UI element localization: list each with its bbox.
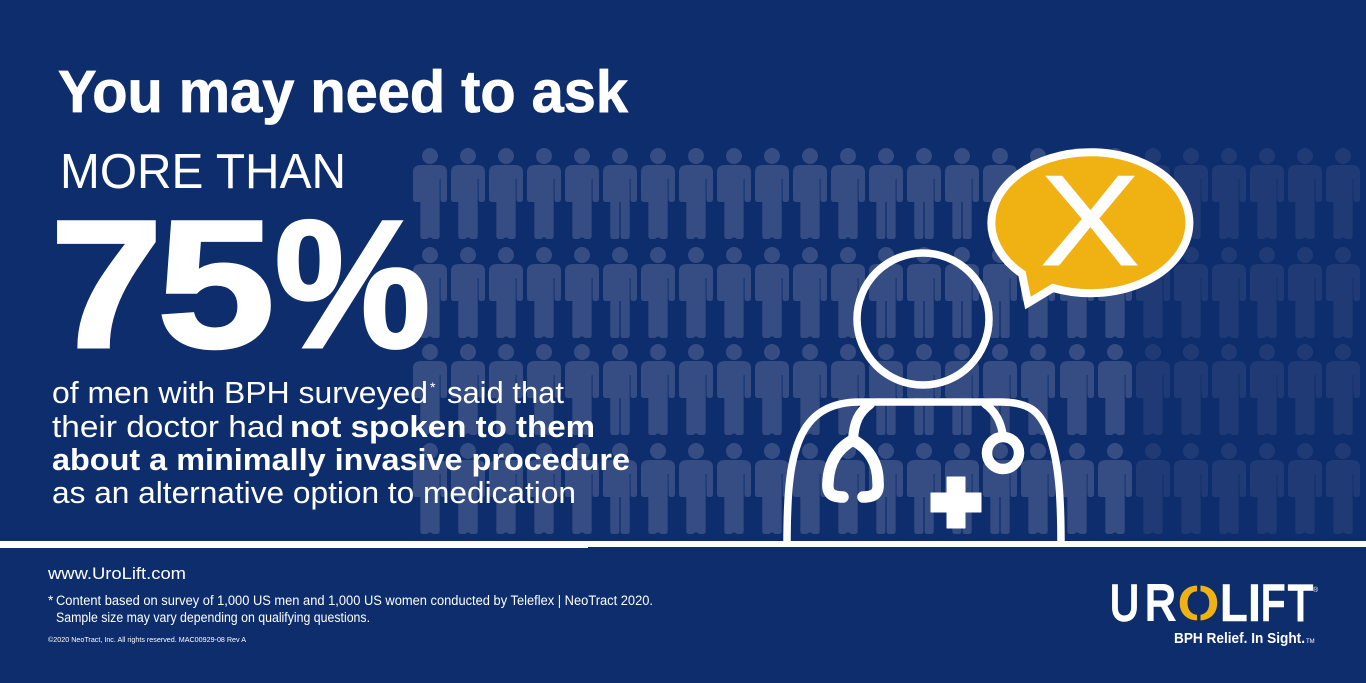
footnote	[48, 593, 653, 625]
letter X: X	[1040, 149, 1140, 293]
subheading: more than: MORE THAN	[60, 145, 346, 199]
logo letters: I	[1248, 575, 1261, 631]
tagline: BPH Relief. In Sight.	[1174, 630, 1305, 647]
description text block: not spoken to them	[290, 409, 595, 444]
logo letters: F	[1261, 575, 1285, 631]
description text block	[52, 375, 630, 510]
footnote: Content based on survey of 1,000 US men and 1,000 US women conducted by Teleflex | NeoTract 2020.	[56, 593, 653, 608]
registered mark: ®	[1313, 586, 1319, 594]
big statistic: 75%: %	[274, 182, 430, 386]
logo letters: L	[1220, 575, 1247, 631]
description text block: as an alternative option to medication	[52, 475, 576, 510]
copyright line: ©2020 NeoTract, Inc. All rights reserved. MAC00929-08 Rev A	[48, 636, 246, 644]
description text block: about a minimally invasive procedure	[52, 442, 630, 477]
title: You may need to ask	[58, 59, 628, 125]
doctor icon	[787, 253, 1061, 545]
icon: medical cross	[931, 477, 981, 528]
trademark: TM	[1306, 639, 1315, 645]
logo letter O: O	[1178, 577, 1220, 631]
logo letters	[1110, 575, 1313, 631]
icon: doctor shoulders	[787, 402, 1061, 545]
big statistic: 75%: 7	[50, 182, 163, 386]
speech bubble with X	[991, 149, 1189, 303]
website url: www.UroLift.com	[47, 564, 186, 583]
logo letters: T	[1288, 575, 1313, 631]
description text block: said that	[447, 375, 564, 410]
logo letters: U	[1110, 575, 1139, 631]
footnote: Sample size may vary depending on qualifying questions.	[56, 610, 370, 625]
big statistic: 75%: 5	[157, 182, 275, 386]
description text block: their doctor had	[52, 409, 284, 444]
icon: stethoscope	[828, 404, 1019, 497]
description text block: *	[430, 379, 436, 395]
bubble shape	[991, 152, 1189, 303]
big statistic: 75%	[50, 182, 430, 386]
logo letters: R	[1145, 575, 1176, 631]
description text block: of men with BPH surveyed	[52, 375, 428, 410]
logo: UroLift	[1110, 575, 1319, 647]
footnote: *	[48, 593, 54, 608]
icon: doctor head	[857, 253, 989, 385]
divider line	[0, 541, 1366, 548]
pictogram: rows of people	[413, 148, 1360, 534]
